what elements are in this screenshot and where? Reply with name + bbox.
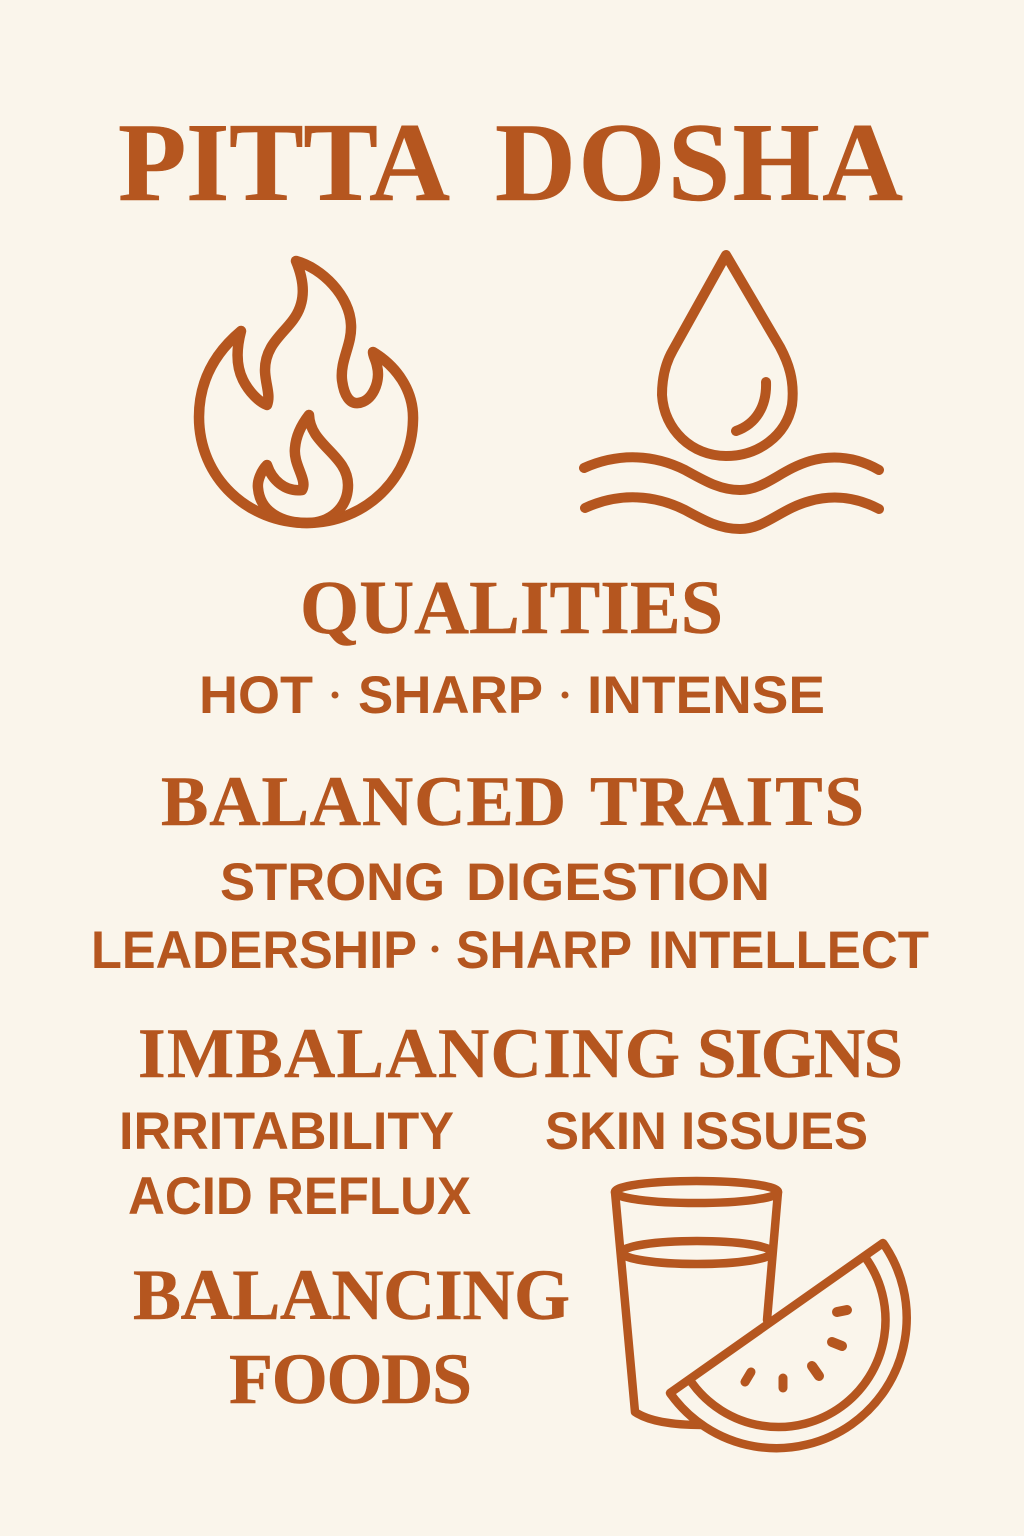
text: qualities list: HOT — [199, 666, 313, 725]
heading: balanced traits — [161, 763, 864, 841]
text: qualities list — [199, 666, 825, 725]
heading: balanced traits: TRAITS — [590, 763, 864, 841]
heading: balancing foods: FOODS — [229, 1339, 472, 1419]
text: qualities list: SHARP — [358, 666, 543, 725]
heading: balancing foods: BALANCING — [133, 1255, 570, 1335]
text: skin issues: SKIN ISSUES — [545, 1102, 868, 1161]
icon: glass and watermelon slice — [615, 1181, 907, 1448]
title — [118, 101, 903, 225]
heading: imbalancing signs: SIGNS — [697, 1015, 903, 1093]
text: strong digestion: DIGESTION — [466, 853, 770, 912]
text: leadership and sharp intellect: LEADERSHIP — [91, 921, 417, 980]
heading: balanced traits: BALANCED — [161, 763, 566, 841]
text: strong digestion: STRONG — [220, 853, 445, 912]
heading: imbalancing signs: IMBALANCING — [138, 1015, 680, 1093]
icon: flame — [199, 261, 413, 523]
heading: balancing foods — [133, 1255, 570, 1419]
title: PITTA — [118, 101, 450, 225]
icon: water drop with waves — [584, 255, 879, 529]
text: leadership and sharp intellect: SHARP — [456, 921, 632, 980]
text: leadership and sharp intellect — [91, 921, 929, 980]
text: strong digestion — [220, 853, 770, 912]
title: DOSHA — [495, 101, 903, 225]
heading: qualities: QUALITIES — [300, 566, 723, 650]
text: acid reflux: ACID REFLUX — [128, 1167, 471, 1226]
text: irritability: IRRITABILITY — [119, 1102, 454, 1161]
text: leadership and sharp intellect: INTELLECT — [648, 921, 929, 980]
text: qualities list: INTENSE — [587, 666, 825, 725]
